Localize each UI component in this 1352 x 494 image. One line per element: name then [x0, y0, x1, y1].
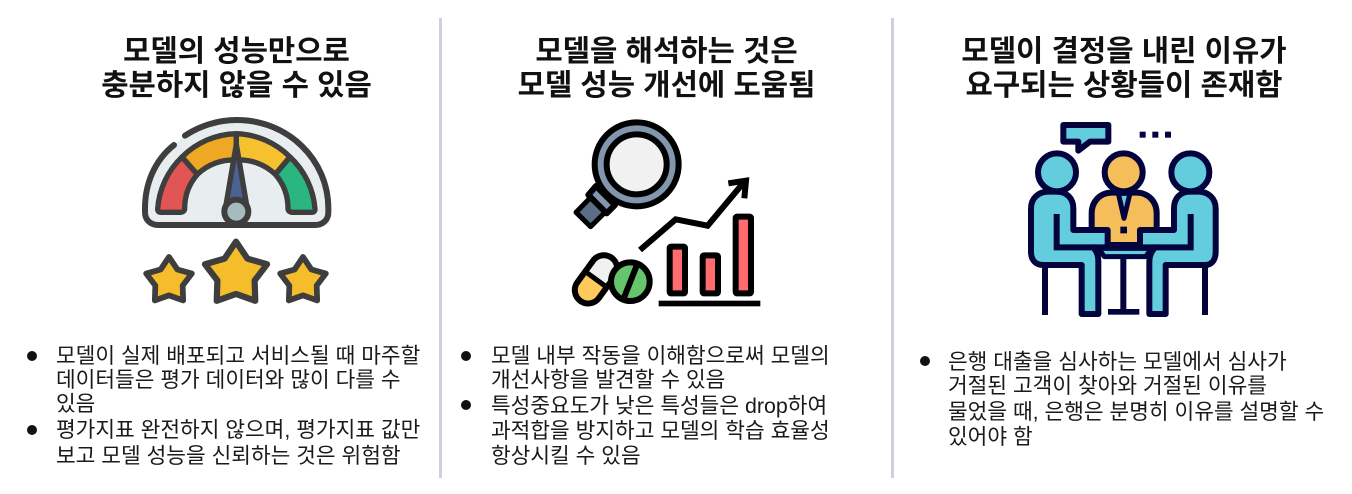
text block: panel 2 bullets: 과적합을 방지하고 모델의 학습 효율성 — [491, 419, 830, 443]
heading: panel 1 — [101, 35, 372, 102]
panel: interpretation helps improve performance — [461, 35, 830, 468]
text block: panel 1 bullets: 있음 — [56, 392, 95, 416]
text block: panel 1 bullets: 모델이 실제 배포되고 서비스될 때 마주할 — [56, 344, 420, 368]
heading: panel 3: 모델이 결정을 내린 이유가 — [961, 35, 1287, 68]
heading: panel 1: 충분하지 않을 수 있음 — [101, 69, 372, 102]
icon: gauge and stars — [142, 117, 332, 304]
heading: panel 3: 요구되는 상황들이 존재함 — [966, 69, 1282, 102]
text block: panel 1 bullets: 데이터들은 평가 데이터와 많이 다를 수 — [56, 368, 401, 392]
text block: panel 3 bullets: 물었을 때, 은행은 분명히 이유를 설명할 수 — [948, 400, 1324, 424]
panel: performance alone is not enough — [27, 35, 420, 468]
text block: panel 1 bullets — [27, 344, 420, 468]
text block: panel 1 bullets: 보고 모델 성능을 신뢰하는 것은 위험함 — [56, 444, 401, 468]
heading: panel 3 — [961, 35, 1287, 102]
text block: panel 2 bullets: 개선사항을 발견할 수 있음 — [491, 368, 725, 392]
text block: panel 2 bullets: 모델 내부 작동을 이해함으로써 모델의 — [491, 344, 830, 368]
text block: panel 1 bullets: 평가지표 완전하지 않으며, 평가지표 값만 — [56, 418, 420, 442]
icon: magnifier, pills and growth chart — [572, 119, 760, 306]
heading: panel 2 — [518, 35, 815, 102]
text block: panel 3 bullets: 있어야 함 — [948, 425, 1033, 449]
panel: situations requiring reasons for decisions — [920, 35, 1324, 449]
icon: three people meeting at a table — [1028, 122, 1219, 317]
text block: panel 3 bullets: 거절된 고객이 찾아와 거절된 이유를 — [948, 374, 1267, 398]
text block: panel 2 bullets: 항상시킬 수 있음 — [491, 444, 641, 468]
heading: panel 1: 모델의 성능만으로 — [123, 35, 350, 68]
heading: panel 2: 모델을 해석하는 것은 — [535, 35, 798, 68]
text block: panel 2 bullets — [461, 344, 830, 468]
text block: panel 3 bullets — [920, 350, 1324, 449]
text block: panel 3 bullets: 은행 대출을 심사하는 모델에서 심사가 — [948, 350, 1287, 374]
text block: panel 2 bullets: 특성중요도가 낮은 특성들은 drop하여 — [491, 394, 827, 418]
heading: panel 2: 모델 성능 개선에 도움됨 — [518, 69, 815, 102]
